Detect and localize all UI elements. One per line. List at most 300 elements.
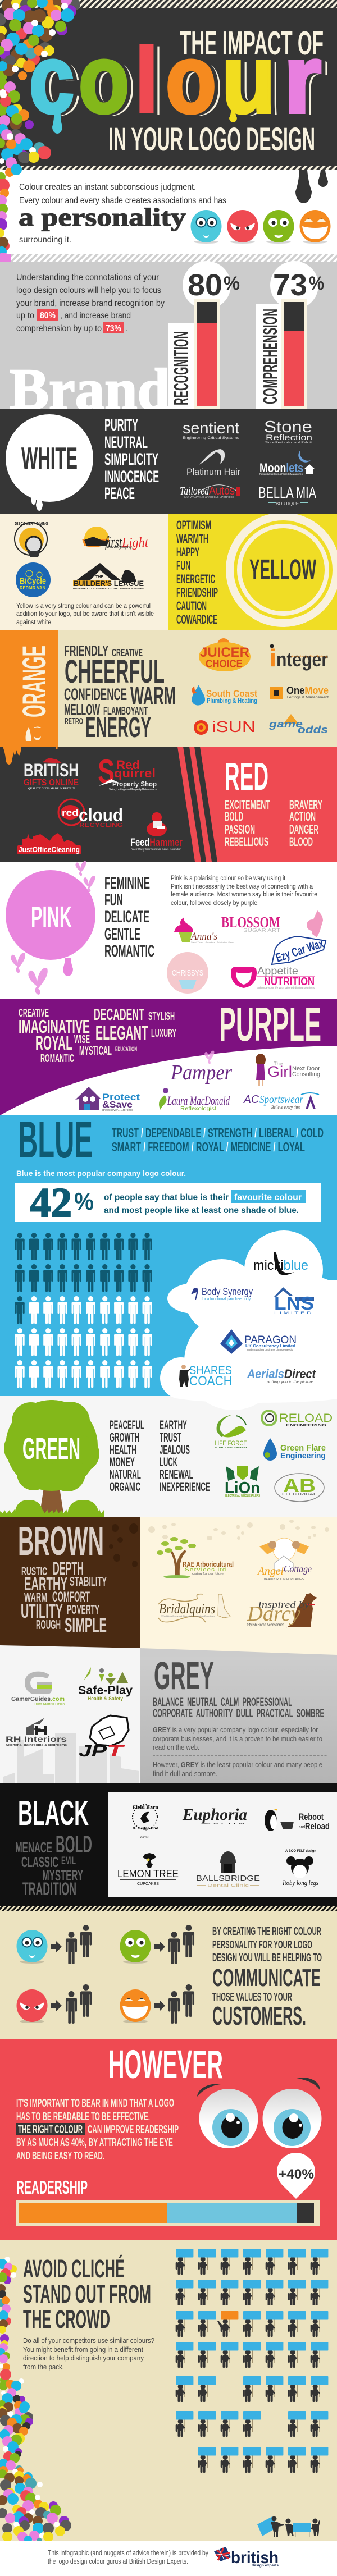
word cloud: purple: STYLISH bbox=[148, 1010, 175, 1023]
word list: red: ACTION bbox=[289, 809, 316, 823]
text block: readability: BY AS MUCH AS 40%, BY ATTRACTING THE EYE bbox=[16, 2136, 173, 2149]
logo: first light: Photography bbox=[107, 546, 132, 550]
word list: yellow: COWARDICE bbox=[176, 612, 217, 626]
logo: reload: RELOAD bbox=[279, 1412, 333, 1425]
logo: first light bbox=[82, 527, 149, 550]
word list: yellow: FRIENDSHIP bbox=[176, 585, 218, 600]
icon: eyebrows bbox=[197, 2078, 320, 2097]
heading: colour: o bbox=[169, 26, 220, 134]
word list: pink: FUN bbox=[104, 891, 123, 909]
logo: the girl next door: Next Door bbox=[292, 1065, 320, 1072]
word cloud: black: CLASSIC bbox=[21, 1854, 58, 1870]
logo: stone reflection: Reflection bbox=[266, 433, 312, 442]
text block: understanding: Understanding the connotations of your bbox=[16, 273, 160, 282]
word cloud: orange: FLAMBOYANT bbox=[103, 705, 148, 717]
text block: pink note: female audience. Most women say blue is their favourite bbox=[171, 891, 317, 898]
logo: gamer guides: GamerGuides.com bbox=[11, 1696, 65, 1703]
logo: moonlets bbox=[259, 450, 315, 475]
text block: grey note: GREY is a very popular company logo colour, especially for bbox=[153, 1726, 318, 1734]
word cloud: purple: EDUCATION bbox=[115, 1045, 137, 1053]
logo: the girl next door: Consulting bbox=[292, 1071, 320, 1078]
logo: green flare bbox=[263, 1438, 326, 1461]
panel: black bbox=[0, 1783, 337, 1906]
logo: integer: nteger bbox=[276, 648, 328, 671]
text block: intro: Every colour and every shade creates associations and has bbox=[19, 196, 226, 205]
text block: grey note: However, GREY is the least popular colour and many people bbox=[153, 1761, 322, 1769]
word list: grey bbox=[153, 1696, 324, 1720]
icon: orange drips bbox=[3, 747, 57, 765]
panel: green background bbox=[0, 1396, 337, 1517]
text block: understanding: your brand, increase brand recognition by bbox=[16, 299, 165, 308]
logo: lion bbox=[225, 1466, 261, 1498]
logo: gamer guides: From Start to Finish bbox=[34, 1703, 65, 1706]
logo: lion: LiOn bbox=[225, 1479, 260, 1497]
logo: itoby long legs: Itoby long legs bbox=[282, 1879, 318, 1887]
logo: gameodds: odds bbox=[298, 724, 328, 735]
text block: credit: the logo design colour gurus at British Design Experts. bbox=[48, 2557, 188, 2565]
logo: first light: Light bbox=[121, 536, 149, 550]
panel: header bbox=[0, 0, 337, 203]
word list: white: SIMPLICITY bbox=[104, 450, 158, 469]
logo: isun: iSUN bbox=[212, 718, 256, 735]
logo: euphoria: S A L O N bbox=[204, 1822, 245, 1825]
logo: field barn: Farms bbox=[140, 1836, 148, 1839]
word list: yellow: ENERGETIC bbox=[176, 572, 215, 586]
text block: competitors: from the pack. bbox=[23, 2363, 64, 2371]
word list: green: TRUST bbox=[160, 1430, 181, 1444]
panel: grey bbox=[0, 1645, 337, 1783]
word list: yellow: WARMTH bbox=[176, 532, 208, 546]
logo: lns limited: LIMITED bbox=[274, 1311, 313, 1315]
panel: however bbox=[0, 2039, 337, 2240]
word list: yellow bbox=[176, 518, 218, 626]
callout: 42 percent: and most people like at least one shade of blue. bbox=[104, 1206, 299, 1215]
pictogram: crowd with signs bbox=[176, 2249, 328, 2473]
logo: rh interiors bbox=[6, 1718, 67, 1747]
logo: discovery diving bbox=[15, 522, 48, 557]
confetti: bottom left bbox=[0, 2257, 71, 2543]
chart: recognition bar: 80 bbox=[188, 268, 222, 302]
logo: anna's sweet treats: Sweet Treats · Cupcakes · Celebration Cakes bbox=[191, 941, 234, 944]
logo: shares coach: COACH bbox=[189, 1374, 232, 1389]
logo: bridalquins bbox=[158, 1594, 230, 1622]
text block: competitors bbox=[23, 2337, 154, 2371]
word cloud: brown: WARM bbox=[24, 1590, 47, 1604]
word list: red: BLOOD bbox=[289, 835, 313, 849]
chart: comprehension bar bbox=[256, 261, 324, 409]
logo: tailored autos: CAR WRAPPING & VEHICLE UPGRADES bbox=[184, 496, 234, 498]
icon: white blob bbox=[6, 414, 93, 511]
logo: british design experts bbox=[214, 2547, 279, 2568]
word cloud: orange: RETRO bbox=[65, 717, 83, 726]
logo: lns limited bbox=[274, 1287, 314, 1315]
logo: angel cottage bbox=[257, 1538, 312, 1581]
logo: lns limited: LNS bbox=[274, 1293, 314, 1314]
logo: ab electrical: ELECTRICAL bbox=[282, 1493, 317, 1497]
word cloud: black: EVIL bbox=[61, 1855, 76, 1867]
word cloud: black: MYSTERY bbox=[42, 1866, 83, 1884]
logo: reboot and reload: and bbox=[299, 1825, 305, 1829]
text block: understanding: 73% bbox=[106, 324, 121, 333]
heading: colour: l bbox=[142, 31, 164, 133]
logo: ballsbridge: BALLSBRIDGE bbox=[196, 1874, 260, 1883]
text block: yellow note bbox=[16, 603, 154, 626]
logo: body synergy bbox=[191, 1286, 253, 1301]
logo: paragon: understanding business change needs bbox=[247, 1348, 293, 1351]
logo: sentient: Engineering Critical Systems bbox=[183, 436, 240, 440]
logo: tailored autos: Autos bbox=[209, 485, 235, 497]
logo: paragon bbox=[220, 1329, 297, 1354]
text block: pink note: Pink isn't necessarily the best way of connecting with a bbox=[171, 884, 313, 890]
logo: protect and save: great cover......for less bbox=[102, 1109, 134, 1112]
logo: aerials direct: Aerials bbox=[247, 1367, 284, 1381]
icon: red face to people bbox=[17, 1984, 92, 2024]
logo: pamper bbox=[170, 1051, 232, 1085]
logo: british gifts online: QUALITY GIFTS MADE IN BRITAIN bbox=[28, 788, 75, 790]
confetti: top left bbox=[0, 0, 80, 266]
logo: bridalquins: Wedding Dress & Special Occasion Boutique bbox=[161, 1615, 215, 1617]
text block: pink note: Pink is a polarising colour so be wary using it. bbox=[171, 875, 287, 882]
icon: pink blob bbox=[6, 870, 95, 976]
label: red: RED bbox=[225, 754, 268, 798]
text block: understanding: comprehension by up to bbox=[16, 324, 102, 333]
text block: readability: CAN IMPROVE READERSHIP bbox=[88, 2124, 179, 2136]
logo: reboot and reload: Reboot bbox=[299, 1811, 324, 1822]
text block: pink note bbox=[171, 875, 317, 907]
chart: recognition bar: % bbox=[224, 273, 240, 294]
logo: safe-play: Safe-Play bbox=[78, 1684, 133, 1697]
logo: red cloud recycling: cloud bbox=[79, 805, 123, 825]
logo: bella mia bbox=[258, 484, 316, 506]
logo: appetite for nutrition bbox=[231, 966, 315, 989]
heading: avoid cliche: AVOID CLICHÉ bbox=[23, 2254, 125, 2283]
label: black: BLACK bbox=[18, 1794, 89, 1833]
logo: bella mia: BOUTIQUE bbox=[276, 501, 299, 506]
logo: feedhammer: Your Daily Warhammer News Roundup bbox=[131, 848, 181, 852]
logo: reboot and reload: Reload bbox=[305, 1821, 330, 1832]
logo: integer bbox=[270, 644, 328, 672]
logo: onemove bbox=[270, 685, 329, 699]
logo: inspired by darcy bbox=[247, 1593, 317, 1628]
word list: yellow: CAUTION bbox=[176, 599, 207, 613]
watermark: brand: Brand bbox=[10, 356, 170, 422]
logo: inspired by darcy: Stylish Home Accessories bbox=[247, 1622, 284, 1627]
word list: pink: GENTLE bbox=[104, 925, 140, 944]
heading: colour: o bbox=[172, 27, 222, 135]
word list: yellow: OPTIMISM bbox=[176, 518, 211, 532]
logo: blossom: SUGAR ART bbox=[243, 928, 280, 933]
logo: south coast bbox=[192, 685, 257, 706]
logo: laura macdonald: Reflexologist bbox=[180, 1106, 216, 1112]
word list: green: HEALTH bbox=[110, 1443, 136, 1457]
logo: british design experts: british bbox=[231, 2548, 279, 2567]
word list: red: REBELLIOUS bbox=[225, 835, 268, 849]
logo: green flare: Engineering bbox=[280, 1451, 326, 1461]
callout: 42 percent: % bbox=[74, 1188, 94, 1215]
logo: red squirrel: S bbox=[98, 753, 115, 790]
word cloud: brown: RUSTIC bbox=[21, 1566, 47, 1578]
word list: green: MONEY bbox=[110, 1455, 135, 1469]
callout: 42 percent bbox=[15, 1180, 321, 1226]
text block: yellow note: addition to your logo, but be aware that it isn't visible bbox=[16, 611, 154, 617]
panel: orange bbox=[0, 630, 337, 747]
logo: micki blue: mickiblue bbox=[253, 1258, 308, 1273]
logo: red squirrel: Red bbox=[116, 758, 140, 772]
logo: british gifts online: BRITISH bbox=[24, 760, 79, 780]
heading: colour: l bbox=[135, 30, 158, 131]
text block: understanding: 80% bbox=[40, 311, 56, 321]
word list: green: PEACEFUL bbox=[110, 1418, 144, 1432]
illustration: city skyline bbox=[3, 1733, 139, 1783]
word list: red: BOLD bbox=[225, 809, 243, 823]
logo: juicer choice: JUICER bbox=[200, 645, 249, 660]
text block: competitors: Do all of your competitors use similar colours? bbox=[23, 2337, 154, 2345]
word cloud: orange: FRIENDLY bbox=[64, 642, 108, 659]
word cloud: orange: ENERGY bbox=[85, 711, 151, 743]
word cloud: purple: MYSTICAL bbox=[79, 1044, 112, 1058]
word list: white: NEUTRAL bbox=[104, 433, 148, 452]
logo: feedhammer: FeedHammer bbox=[130, 837, 183, 849]
text block: grey note: find it dull and sombre. bbox=[153, 1770, 217, 1778]
logo: ac sportswear: Sportswear bbox=[259, 1093, 303, 1106]
logo: gameodds bbox=[268, 714, 328, 735]
heading: however: HOWEVER bbox=[108, 2043, 223, 2087]
logo: ballsbridge bbox=[196, 1851, 260, 1888]
logo: body synergy: Body Synergy bbox=[202, 1286, 253, 1297]
text block: intro: Colour creates an instant subconscious judgment. bbox=[19, 182, 196, 192]
logo: red cloud recycling: RECYCLING bbox=[79, 822, 123, 829]
logo: protect and save bbox=[75, 1087, 140, 1112]
cloud: blue logos bbox=[160, 1230, 337, 1410]
word cloud: brown: SIMPLE bbox=[65, 1614, 107, 1636]
word list: green: EARTHY bbox=[160, 1418, 187, 1432]
word cloud: purple bbox=[19, 1006, 176, 1065]
panel: green bbox=[0, 1400, 333, 1517]
word list: white bbox=[104, 416, 159, 503]
logo: stone reflection: Stone bbox=[264, 418, 312, 436]
word cloud: purple: CREATIVE bbox=[19, 1007, 49, 1019]
word list: blue: SMART / FREEDOM / ROYAL / MEDICINE / LOYAL bbox=[112, 1140, 305, 1154]
panel: red bbox=[0, 747, 337, 862]
logo: field barn: Field Barn bbox=[133, 1805, 159, 1810]
logo: gamer guides bbox=[11, 1672, 65, 1706]
word list: pink: ROMANTIC bbox=[104, 942, 154, 960]
text block: intro: surrounding it. bbox=[19, 235, 71, 245]
text block: readability: IT'S IMPORTANT TO BEAR IN MIND THAT A LOGO bbox=[16, 2097, 174, 2110]
text block: competitors: direction to help distinguish your company bbox=[23, 2354, 144, 2362]
logo: the builder's league: DEDICATED TO STAMPING OUT THE COWBOY BUILDERS bbox=[73, 587, 144, 590]
panel: footer bbox=[0, 2541, 337, 2576]
logo: safe-play: Health & Safety bbox=[88, 1696, 123, 1701]
heading: colour: u bbox=[228, 27, 281, 135]
logo: red cloud recycling: red bbox=[62, 808, 79, 818]
logo: reload bbox=[262, 1411, 333, 1427]
word cloud: brown: POVERTY bbox=[67, 1602, 99, 1617]
logo: red squirrel: Property Shop bbox=[112, 780, 157, 788]
word list: white: PURITY bbox=[104, 416, 138, 434]
panel: yellow bbox=[0, 513, 337, 630]
text block: grey note bbox=[153, 1726, 327, 1778]
panel: brown bbox=[0, 1517, 337, 1657]
word cloud: purple: ELEGANT bbox=[95, 1022, 148, 1044]
logo: inspired by darcy: Inspired by bbox=[257, 1599, 310, 1610]
word cloud: purple: IMAGINATIVE bbox=[19, 1016, 90, 1037]
heading: colour: o bbox=[166, 25, 216, 133]
logo: the builder's league bbox=[73, 563, 144, 590]
heading: colour: o bbox=[79, 25, 129, 133]
panel: brand stats bbox=[0, 254, 337, 422]
word cloud: brown: DEPTH bbox=[53, 1558, 84, 1578]
logo: chrissys cupcakery bbox=[167, 952, 208, 994]
text block: grey note: read on the web. bbox=[153, 1744, 199, 1751]
logo: moonlets: Residential Lettings & Property Management bbox=[259, 473, 304, 475]
word cloud: brown: COMFORT bbox=[52, 1589, 90, 1605]
heading: avoid cliche: THE CROWD bbox=[23, 2305, 110, 2334]
text block: understanding bbox=[16, 273, 165, 333]
logo: green flare: Green Flare bbox=[280, 1443, 326, 1453]
logo: just office cleaning bbox=[17, 833, 81, 854]
text block: readability: THE RIGHT COLOUR bbox=[18, 2124, 83, 2136]
text block: intro: a personality bbox=[19, 203, 186, 231]
text block: understanding: up to bbox=[16, 311, 34, 321]
text block: readability: AND BEING EASY TO READ. bbox=[16, 2150, 104, 2162]
logo: ballsbridge: Dental Clinic bbox=[207, 1884, 249, 1888]
heading: colour: r bbox=[290, 27, 327, 135]
logo: appetite for nutrition: Enhance your life with tailored dieting solutions bbox=[257, 986, 315, 989]
logo: bella mia: BELLA MIA bbox=[258, 484, 316, 501]
logo: lemon tree bbox=[117, 1853, 179, 1886]
word cloud: purple: WISE bbox=[74, 1033, 90, 1046]
word cloud: black bbox=[15, 1831, 92, 1899]
logo: rh interiors: RH Interiors bbox=[6, 1735, 67, 1744]
logo: the girl next door: Girl bbox=[267, 1063, 292, 1080]
logo: the girl next door bbox=[256, 1054, 320, 1086]
word cloud: orange: CONFIDENCE bbox=[64, 685, 127, 704]
logo: aerials direct: Direct bbox=[284, 1367, 317, 1381]
text block: popularity: Blue is the most popular company logo colour. bbox=[16, 1169, 186, 1178]
icon: butterflies bbox=[11, 861, 95, 995]
logo: reload: ENGINEERING bbox=[286, 1424, 327, 1427]
word list: green bbox=[110, 1418, 210, 1494]
logo: bicycle repair van bbox=[16, 562, 51, 597]
logo: red squirrel: quirrel bbox=[114, 766, 156, 780]
text block: understanding: . bbox=[126, 324, 128, 333]
text block: competitors: You might benefit from going in a different bbox=[23, 2346, 143, 2354]
text block: readability bbox=[16, 2097, 179, 2162]
chart: comprehension bar: 73 bbox=[273, 268, 307, 302]
logo: laura macdonald bbox=[159, 1088, 230, 1112]
logo: blossom: BLOSSOM bbox=[221, 914, 280, 931]
callout: plus 40 percent: +40% bbox=[279, 2167, 314, 2182]
logo: stone reflection: Stone Restoration and Rebuilt bbox=[265, 441, 313, 445]
logo: lemon tree: LEMON TREE bbox=[117, 1868, 179, 1879]
logo: red squirrel: Sales, Lettings and Property Maintenance bbox=[109, 788, 157, 791]
word cloud: brown bbox=[21, 1558, 107, 1636]
icon: sideways smile bbox=[26, 726, 41, 741]
logo: lemon tree: CUPCAKES bbox=[137, 1882, 159, 1886]
callout: 42 percent: 42 bbox=[30, 1180, 72, 1226]
text block: credit bbox=[48, 2549, 209, 2565]
text block: communicate message bbox=[212, 1925, 322, 2030]
logo: rae arboricultural: caring for our future bbox=[192, 1572, 224, 1576]
logo: anna's sweet treats: Anna's bbox=[190, 931, 217, 942]
logo: reboot and reload bbox=[265, 1809, 330, 1832]
text block: credit: This infographic (and nuggets of advice therein) is provided by bbox=[48, 2549, 209, 2557]
logo: juicer choice bbox=[199, 638, 251, 671]
logo: angel cottage: Cottage bbox=[284, 1563, 312, 1575]
logo: bicycle repair van: BiCycle bbox=[20, 576, 46, 586]
logo: laura macdonald: Laura MacDonald bbox=[167, 1093, 230, 1108]
logo: rae arboricultural bbox=[157, 1537, 234, 1578]
heading: colour: u bbox=[225, 26, 279, 134]
logo: pamper: Pamper bbox=[170, 1061, 232, 1085]
text block: pink note: colour, followed closely by purple. bbox=[171, 900, 259, 907]
word cloud: orange bbox=[64, 642, 176, 743]
logo: onemove: Lettings & Management bbox=[287, 696, 329, 699]
word cloud: orange: CHEERFUL bbox=[65, 653, 165, 690]
word list: red: EXCITEMENT bbox=[225, 798, 270, 812]
word cloud: brown: EARTHY bbox=[24, 1573, 67, 1594]
panel: blue bbox=[0, 1110, 337, 1396]
panel: white bbox=[0, 409, 337, 514]
word list: green: INEXPERIENCE bbox=[160, 1480, 210, 1494]
heading: colour: o bbox=[85, 27, 135, 135]
logo: moonlets: Moonlets bbox=[259, 461, 303, 475]
word cloud: purple: ROMANTIC bbox=[40, 1053, 74, 1065]
panel: purple bbox=[0, 998, 337, 1115]
word cloud: black: MENACE bbox=[15, 1839, 52, 1856]
logo: stone reflection bbox=[264, 418, 313, 445]
label: pink: PINK bbox=[31, 900, 72, 934]
word list: blue: TRUST / DEPENDABLE / STRENGTH / LIBERAL / COLD bbox=[112, 1125, 324, 1140]
logo: angel cottage: BEAUTY ROOM FOR LADIES bbox=[264, 1578, 304, 1581]
logo: lion: ELECTRICAL WHOLESALERS bbox=[225, 1494, 261, 1498]
logo: just office cleaning: JustOfficeCleaning bbox=[19, 845, 80, 854]
panel: avoid cliche bbox=[0, 2240, 337, 2543]
word cloud: brown: STABILITY bbox=[70, 1574, 107, 1589]
text block: yellow note: against white! bbox=[16, 619, 53, 626]
logo: rae arboricultural: Services ltd. bbox=[185, 1567, 229, 1572]
icon: orange face to people bbox=[120, 1984, 194, 2024]
callout: 42 percent: of people say that blue is their bbox=[104, 1193, 229, 1202]
word cloud: black: TRADITION bbox=[22, 1879, 76, 1899]
logo: the builder's league: BUILDER'S LEAGUE bbox=[74, 579, 144, 588]
word list: white: INNOCENCE bbox=[104, 468, 159, 486]
text block: intro bbox=[19, 182, 226, 245]
logo: british gifts online: GIFTS ONLINE bbox=[24, 778, 79, 788]
logo: british design experts: design experts bbox=[252, 2564, 279, 2568]
logo: jpt: T bbox=[107, 1742, 125, 1760]
callout: 42 percent: favourite colour bbox=[234, 1193, 302, 1202]
chart: comprehension bar: % bbox=[309, 273, 324, 294]
logo: the builder's league: THE bbox=[95, 575, 103, 579]
heading: colour: o bbox=[82, 26, 133, 134]
icon: blue face to people bbox=[17, 1925, 92, 1964]
word list: pink: FEMININE bbox=[104, 874, 150, 893]
logo: aerials direct bbox=[247, 1367, 317, 1384]
logo: discovery diving: DISCOVERY DIVING bbox=[15, 522, 48, 526]
logo: micki blue bbox=[253, 1252, 308, 1275]
text block: readability: HAS TO BE READABLE TO BE EFFECTIVE. bbox=[16, 2111, 150, 2123]
word list: red: PASSION bbox=[225, 822, 255, 836]
logo: red squirrel bbox=[98, 753, 157, 791]
logo: paragon: PARAGON bbox=[244, 1334, 297, 1346]
icon: right eye bbox=[263, 2089, 321, 2148]
logo: aerials direct: putting you in the picture bbox=[266, 1380, 313, 1384]
logo: ab electrical: AB bbox=[283, 1475, 316, 1497]
decoration: pale spots bbox=[148, 1520, 329, 1540]
text block: grey note: corporate businesses, and it is a proven to be much easier to bbox=[153, 1735, 322, 1743]
